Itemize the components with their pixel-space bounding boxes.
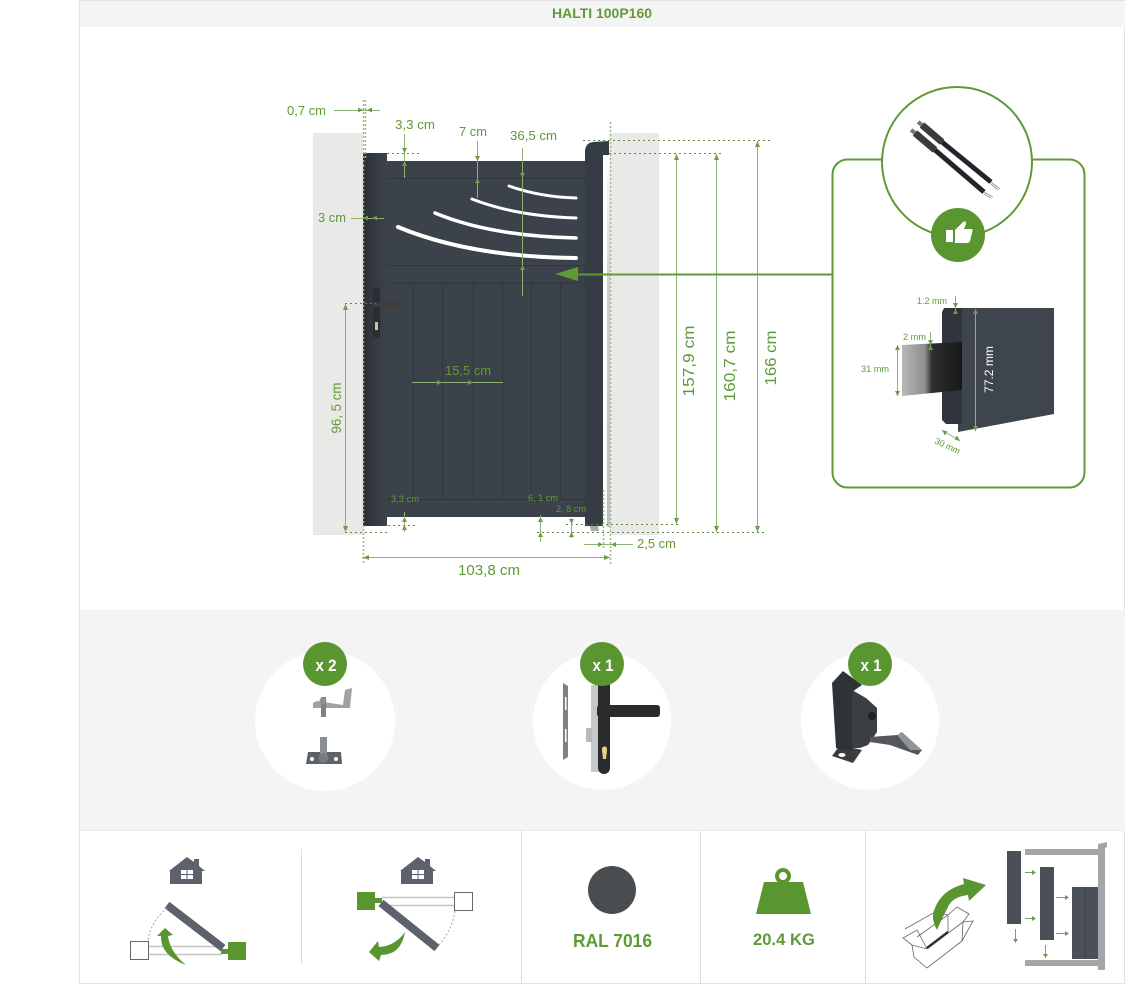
item: gate stop: x 1 (860, 656, 882, 675)
item: gate stop (801, 642, 939, 790)
arrow: out of box (933, 878, 986, 930)
dimension labels: 160,7 cm (722, 330, 739, 402)
dimension labels: 3 cm (318, 210, 346, 225)
assembly arrows (1013, 870, 1069, 958)
dimension labels: 36,5 cm (510, 128, 557, 143)
icon: house (400, 857, 436, 884)
item: hinges: x 2 (316, 656, 336, 675)
dimension labels: 96, 5 cm (328, 382, 344, 434)
handle (373, 287, 400, 338)
closed gate diagram (357, 892, 472, 961)
panel: included hardware (80, 610, 1125, 830)
profile dimensions: 30 mm (933, 436, 962, 456)
gate drawing (363, 141, 610, 531)
profile dimensions: 2 mm (903, 332, 926, 342)
item: lock and handle (533, 642, 671, 790)
panel: profile detail (832, 87, 1084, 488)
icon: unpack box (903, 878, 986, 968)
dimension lines (334, 100, 770, 565)
profile dimensions: 77.2 mm (982, 346, 996, 393)
infill panel (387, 161, 585, 517)
profile dimensions (861, 296, 996, 456)
arrow: gate to profile detail (555, 267, 832, 281)
dimension labels: 2,5 cm (637, 536, 676, 551)
rail grooves (387, 178, 585, 500)
floor stop (590, 526, 599, 531)
dimension labels: 103,8 cm (458, 562, 520, 579)
dimension labels: 3,3 cm (395, 117, 435, 132)
gap strip by right wall (607, 155, 610, 527)
dimension labels: 2, 8 cm (556, 504, 586, 515)
icon: house (169, 857, 205, 884)
icon: opening inward, left (130, 857, 246, 965)
icon: weight (753, 870, 815, 949)
dimension labels (287, 103, 780, 579)
icon: thumbs up badge (931, 208, 985, 262)
colour swatch: RAL 7016 (573, 931, 652, 951)
profile face (958, 308, 1054, 432)
steel insert (902, 342, 962, 396)
dimension labels: 0,7 cm (287, 103, 326, 118)
dimension labels: 7 cm (459, 124, 487, 139)
dimension labels: 6, 1 cm (528, 493, 558, 504)
wall left (313, 133, 363, 535)
profile dimensions: 31 mm (861, 364, 889, 374)
icon: actuator arms (911, 122, 1000, 198)
profile end (942, 308, 962, 424)
item: hinges (255, 642, 395, 791)
right post (585, 141, 609, 526)
row dividers (80, 830, 1125, 983)
profile section drawing (902, 308, 1054, 432)
item: lock and handle: x 1 (592, 656, 614, 675)
dimension labels: 166 cm (763, 330, 780, 386)
dimension labels: 3,3 cm (391, 494, 419, 505)
dimension labels: 157,9 cm (681, 326, 698, 396)
icon: opening outward, right (357, 857, 472, 961)
title bar (80, 1, 1125, 27)
left post (363, 153, 387, 526)
colour swatch (573, 866, 652, 951)
curved slots (398, 186, 576, 258)
callout circle: actuators (882, 87, 1032, 237)
icon: assembly rack (1007, 842, 1107, 970)
dimension labels: 15,5 cm (445, 363, 491, 378)
open gate diagram (130, 905, 246, 965)
title bar: HALTI 100P160 (552, 5, 652, 21)
icon: weight: 20.4 KG (753, 930, 815, 949)
profile dimensions: 1.2 mm (917, 296, 947, 306)
wall right (610, 133, 659, 535)
